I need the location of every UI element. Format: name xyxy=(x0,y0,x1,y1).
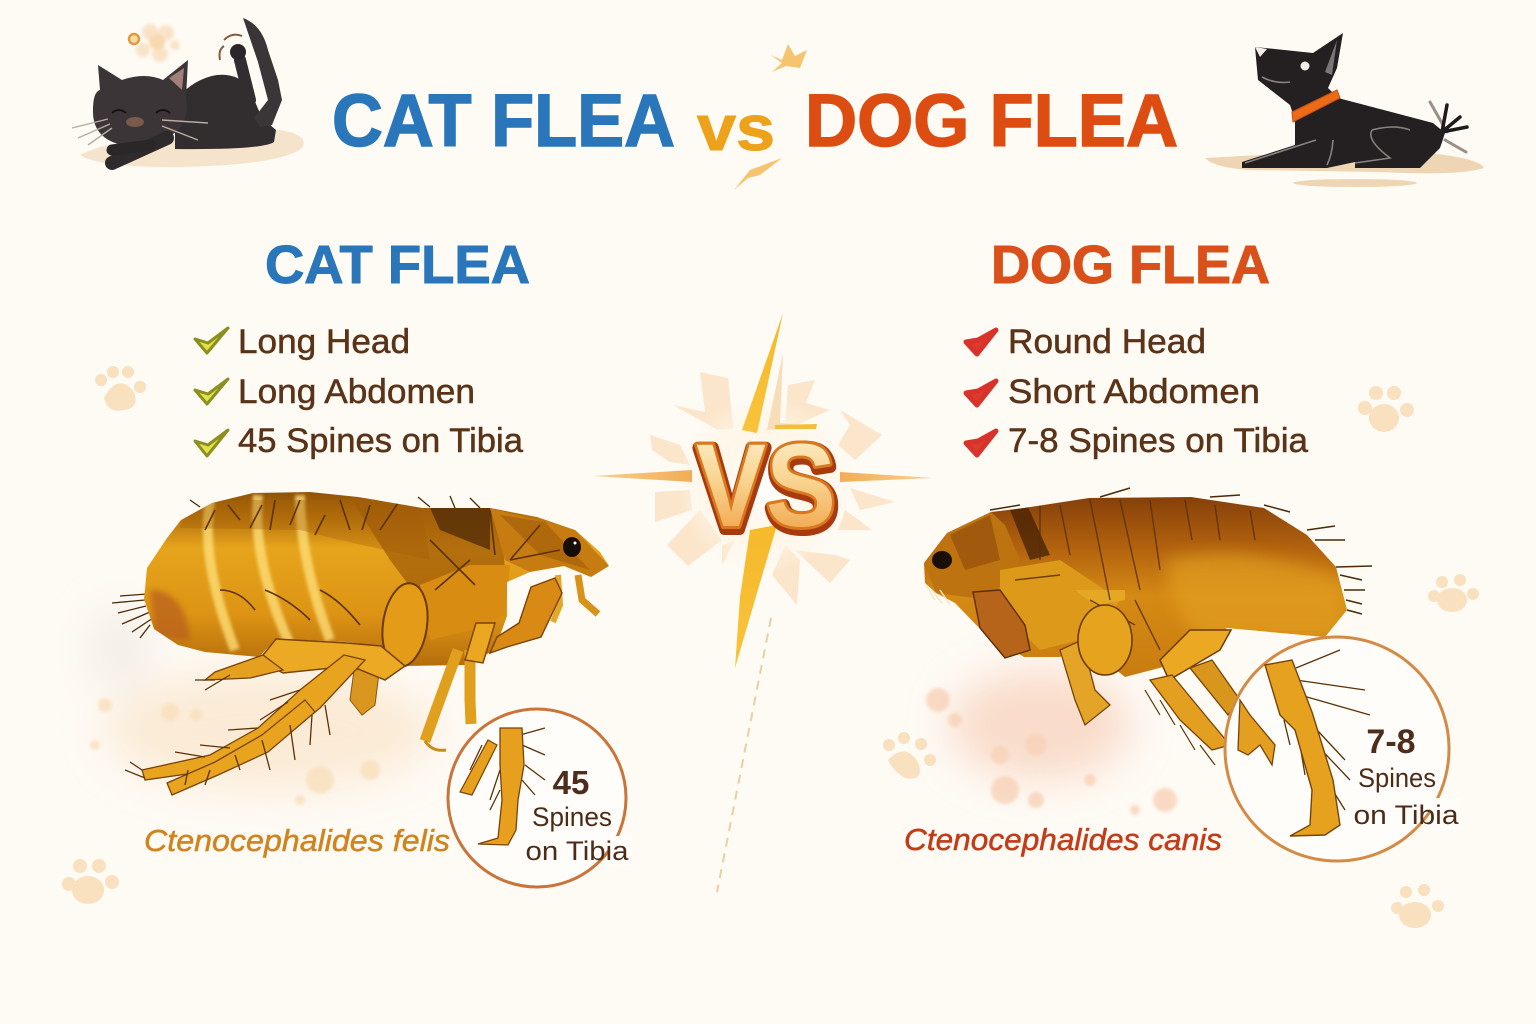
species label: cat flea: Ctenocephalides felis xyxy=(144,823,450,858)
title: vs xyxy=(697,92,775,164)
paw prints xyxy=(62,366,1479,928)
list: cat flea traits: Long Abdomen xyxy=(238,373,475,411)
inset circle: cat flea tibia: 45 xyxy=(553,764,589,801)
background wash: right xyxy=(926,670,1177,815)
title xyxy=(332,79,1178,164)
inset circle: dog flea tibia: on Tibia xyxy=(1354,800,1460,830)
list: dog flea traits: Round Head xyxy=(1008,323,1206,361)
list: cat flea traits xyxy=(195,323,523,460)
flea illustration: cat flea xyxy=(112,492,609,795)
heading: dog flea: DOG FLEA xyxy=(991,235,1270,295)
list: dog flea traits xyxy=(966,323,1308,460)
VS emblem: VS xyxy=(697,423,837,555)
list: cat flea traits: Long Head xyxy=(238,323,410,361)
title: DOG FLEA xyxy=(805,79,1178,162)
heading: cat flea: CAT FLEA xyxy=(265,235,530,295)
inset circle: cat flea tibia: on Tibia xyxy=(526,836,630,866)
list: dog flea traits: Short Abdomen xyxy=(1008,373,1260,411)
inset circle: cat flea tibia: Spines xyxy=(532,802,612,832)
list: cat flea traits: 45 Spines on Tibia xyxy=(238,422,523,460)
background wash: left xyxy=(90,610,435,805)
divider: dashed line xyxy=(717,618,771,892)
inset circle: dog flea tibia xyxy=(1225,637,1460,861)
title: CAT FLEA xyxy=(332,79,675,162)
icon: sleeping black cat xyxy=(72,18,304,167)
VS emblem xyxy=(593,313,933,668)
list: dog flea traits: 7-8 Spines on Tibia xyxy=(1008,422,1308,460)
inset circle: cat flea tibia xyxy=(448,709,632,887)
decorative sparks around vs xyxy=(734,44,807,190)
inset circle: dog flea tibia: 7-8 xyxy=(1366,723,1416,761)
icon: black dog xyxy=(1205,33,1484,187)
flea illustration: dog flea xyxy=(924,488,1372,765)
VS emblem: VS xyxy=(696,420,836,552)
inset circle: dog flea tibia: Spines xyxy=(1358,763,1436,793)
species label: dog flea: Ctenocephalides canis xyxy=(904,822,1222,857)
